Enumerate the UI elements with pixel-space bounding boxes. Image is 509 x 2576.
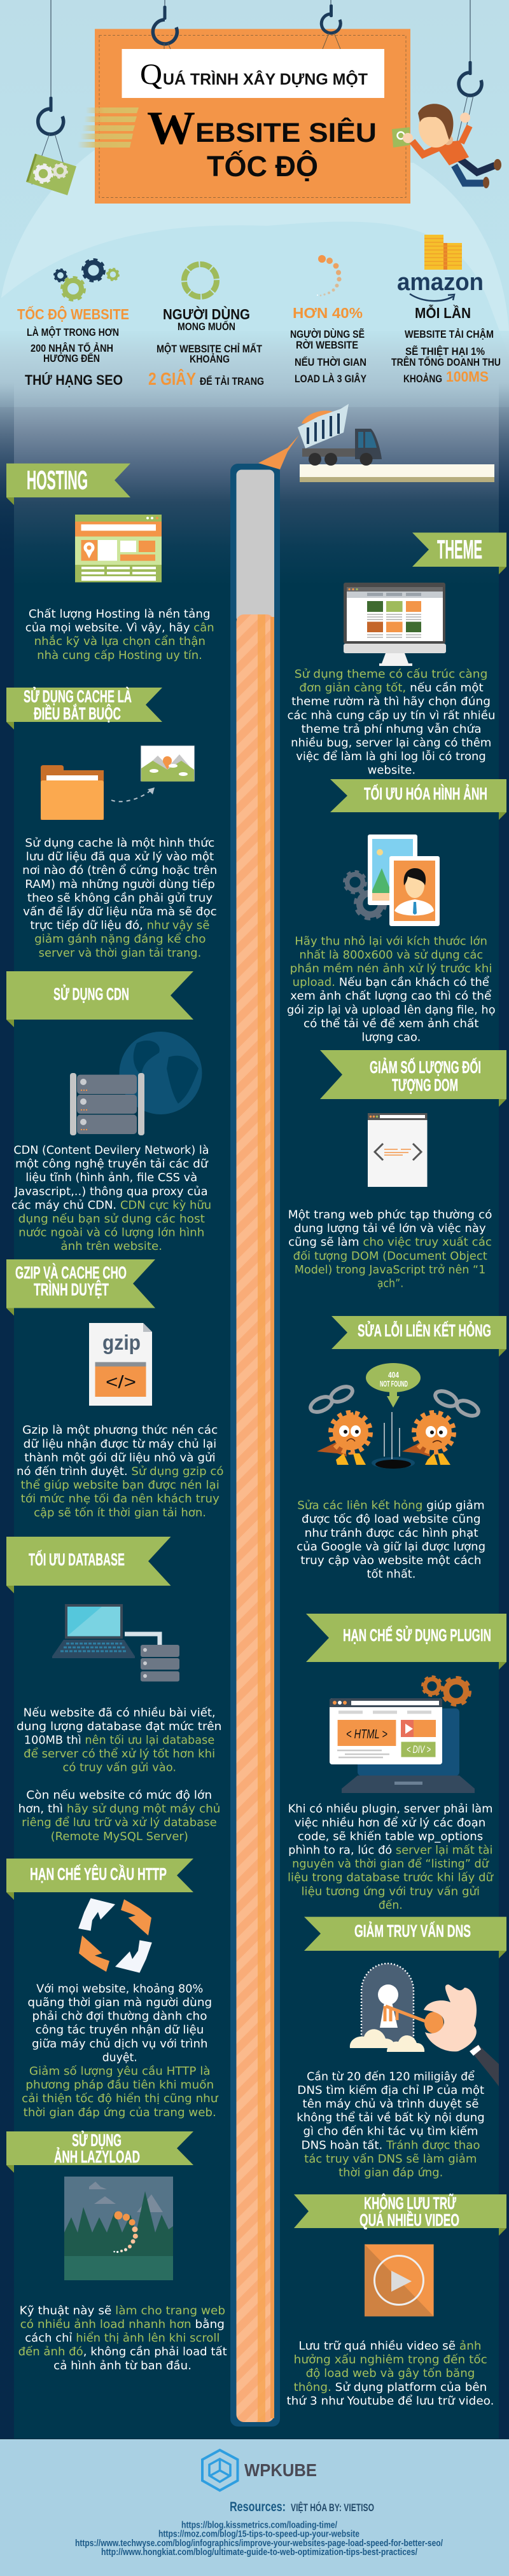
title main <box>147 102 377 183</box>
stat: users expect: KHOẢNG <box>190 353 230 365</box>
text block: gzip: dữ liệu nhận được từ máy chủ lại <box>24 1438 216 1451</box>
hook right with man <box>392 0 501 188</box>
icon: video play <box>365 2244 434 2316</box>
ribbon: cache: SỬ DỤNG CACHE LÀ <box>24 686 132 706</box>
ribbon: cache <box>6 686 162 730</box>
ribbon: http <box>6 1859 193 1900</box>
resource links: http://www.hongkiat.com/blog/ultimate-guide-to-web-optimization-tips-best-practices/ <box>101 2547 418 2558</box>
ribbon: broken links <box>331 1316 506 1357</box>
text block: dom: Một trang web phức tạp thường có <box>288 1208 492 1221</box>
text block: dom: đối tượng DOM (Document Object <box>293 1249 487 1263</box>
text block: theme: việc để làm là ghi log lỗi có trong <box>296 750 486 763</box>
text block: lazyload: đến ảnh đó, không cần phải load tất <box>18 2345 227 2358</box>
text block: cdn: CDN (Content Devilery Network) là <box>13 1144 209 1157</box>
text block: image optimisation: xem ảnh chất lượng cao thì có thể <box>290 990 492 1003</box>
text block: http: quãng thời gian mà người dùng <box>27 1997 212 2009</box>
text block: plugins: Khi có nhiều plugin, server phải làm <box>288 1803 492 1816</box>
ribbon: http: HẠN CHẾ YÊU CẦU HTTP <box>30 1864 167 1884</box>
panel: lazyload <box>6 2129 227 2372</box>
ribbon: hosting <box>6 464 130 505</box>
text block: cache: RAM) mà những người dùng tiếp <box>25 878 215 891</box>
title first line: Q <box>140 58 162 91</box>
text block: cdn: ảnh trên website. <box>60 1240 162 1253</box>
logo: wpkube: WPKUBE <box>244 2460 317 2480</box>
text block: gzip: thể giúp website bạn được nén lại <box>21 1479 220 1492</box>
text block: theme: theme rườm rà thì hãy chọn đúng <box>291 696 491 709</box>
icon: plugin browser on laptop: < HTML > <box>346 1728 387 1742</box>
icon: photo cards <box>345 834 440 926</box>
resources heading: VIỆT HÓA BY: VIETISO <box>291 2502 374 2514</box>
stat: amazon: 100MS <box>446 368 489 385</box>
text block: broken links: như tránh được các hình phạt <box>305 1527 478 1540</box>
resource links <box>75 2520 443 2558</box>
icon: code window <box>368 1113 428 1187</box>
stat: 40 percent: NGƯỜI DÙNG SẼ <box>290 328 365 340</box>
text block: http: cải thiện tốc độ hiển thị cũng như <box>22 2092 218 2105</box>
ribbon: gzip <box>6 1259 155 1315</box>
icon: gzip file <box>89 1323 152 1406</box>
text block: dns: Cần từ 20 đến 120 miligiây để <box>307 2070 475 2083</box>
text block: image optimisation: lượng cao. <box>361 1032 421 1044</box>
icon: website layout <box>75 515 162 583</box>
ribbon: video <box>294 2193 506 2236</box>
text block: broken links <box>296 1499 485 1581</box>
icon: 404 monsters: 404 <box>388 1370 400 1380</box>
amazon logo: amazon <box>397 269 484 296</box>
text block: cache: trực tiếp dữ liệu đó, như vậy sẽ <box>30 919 210 932</box>
text block: http: phương pháp đầu tiên khi muốn <box>25 2079 214 2092</box>
panel: broken links <box>296 1316 506 1581</box>
stat: amazon: SẼ THIỆT HẠI 1% <box>405 345 485 357</box>
poured material <box>258 435 299 469</box>
panel: plugins <box>288 1614 506 1912</box>
hook top 1 <box>153 0 177 49</box>
text block: dns <box>296 2070 485 2179</box>
icon: 404 monsters <box>308 1363 481 1469</box>
text block: video: thứ 3 như Youtube để lưu trữ video. <box>286 2394 494 2407</box>
text block: http: duyệt. <box>102 2051 137 2064</box>
text block: http: giữa máy chủ dịch vụ với trình <box>32 2038 208 2051</box>
text block: image optimisation <box>287 935 496 1044</box>
ribbon: gzip: TRÌNH DUYỆT <box>34 1280 109 1299</box>
ribbon: plugins <box>306 1614 506 1670</box>
panel: http requests <box>6 1859 218 2119</box>
panel: hosting <box>6 464 214 662</box>
ribbon: dom: TƯỢNG DOM <box>392 1076 458 1095</box>
text block: dns: thời gian đáp ứng. <box>338 2166 443 2179</box>
text block: video: hưởng xấu nghiêm trọng đến tốc <box>294 2353 487 2367</box>
stat: website speed: 200 NHÂN TỐ ẢNH <box>31 342 113 354</box>
ribbon: lazyload: SỬ DỤNG <box>72 2129 122 2150</box>
text block: cache: theo sẽ không cần phải gửi truy <box>27 891 213 904</box>
panel: database <box>6 1537 221 1843</box>
title main: TỐC ĐỘ <box>207 150 318 183</box>
icon: folder to image <box>41 745 195 820</box>
text block: http: thời gian đáp ứng của trang web. <box>24 2107 216 2119</box>
text block: http: công tác truyền nhận dữ liệu <box>36 2023 204 2037</box>
text block: video <box>286 2339 494 2407</box>
icon: forest with spinner <box>64 2177 173 2280</box>
stat: users expect: MỘT WEBSITE CHỈ MẤT <box>157 343 263 355</box>
text block: http <box>22 1983 218 2119</box>
stat: users expect: 2 GIÂY <box>148 369 196 389</box>
icon: monitor <box>344 583 446 666</box>
icon: refresh arrows <box>78 1898 152 1973</box>
text block: plugins <box>288 1803 494 1912</box>
stat: users expect: ĐỂ TẢI TRANG <box>200 375 264 387</box>
text block: hosting <box>25 607 214 662</box>
icon: loading ring <box>185 265 216 296</box>
title main: W <box>147 102 195 155</box>
icon: gzip file: gzip <box>102 1331 141 1354</box>
text block: cdn: một công nghệ truyền tải các dữ <box>15 1158 209 1171</box>
panel: video <box>286 2193 506 2407</box>
title first line <box>140 58 368 91</box>
title first line: UÁ TRÌNH XÂY DỰNG MỘT <box>163 69 368 88</box>
text block: hosting: nhà cung cấp Hosting uy tín. <box>37 649 202 662</box>
text block: cache <box>22 837 217 960</box>
title main: EBSITE SIÊU <box>195 117 377 148</box>
text block: database: riêng để lưu trữ và xử lý database <box>22 1816 217 1829</box>
text block: theme: đơn giản càng tốt, nếu cần một <box>299 681 484 695</box>
ribbon: dom <box>320 1050 506 1107</box>
text block: dns: tác truy vấn DNS sẽ làm giảm <box>304 2152 477 2166</box>
truck pouring into tube <box>258 404 494 482</box>
stat: users expect <box>148 265 264 389</box>
ribbon: lazyload: ẢNH LAZYLOAD <box>54 2146 140 2166</box>
text block: hosting: nhắc kỹ và lựa chọn cẩn thận <box>34 635 206 648</box>
text block: cdn: liệu tĩnh (hình ảnh, file CSS và <box>25 1172 197 1184</box>
text block: dom: ạch”. <box>377 1277 403 1290</box>
panel: cdn <box>6 971 211 1253</box>
text block: database: để server có thể xử lý tốt hơn khi <box>24 1747 215 1761</box>
stat: amazon <box>391 235 501 385</box>
stat: users expect: NGƯỜI DÙNG <box>163 305 250 322</box>
icon: laptop and database <box>52 1604 179 1682</box>
stat: website speed <box>17 260 129 388</box>
text block: video: thông. Sử dụng platform của bên <box>294 2381 487 2394</box>
text block: dns: không thể tải về bất kỳ nội dung <box>296 2111 485 2124</box>
platform <box>300 464 494 482</box>
text block: lazyload: Kỹ thuật này sẽ làm cho trang web <box>20 2304 225 2317</box>
text block: database: dung lượng database đạt mức trên <box>17 1721 221 1733</box>
text block: dom <box>288 1208 492 1290</box>
footer <box>0 2439 509 2576</box>
ribbon: database <box>6 1537 171 1593</box>
resource links: https://moz.com/blog/15-tips-to-speed-up-your-website <box>158 2529 359 2540</box>
text block: lazyload: cả hình ảnh từ ban đầu. <box>53 2359 192 2372</box>
text block: cache: lưu dữ liệu đã qua xử lý vào một <box>26 851 214 864</box>
icon: gzip file: </> <box>106 1372 136 1392</box>
panel: image optimisation <box>287 779 506 1044</box>
ribbon: gzip: GZIP VÀ CACHE CHO <box>15 1263 127 1282</box>
text block: dns: tên máy chủ và trình duyệt sẽ <box>303 2098 478 2110</box>
ribbon: cdn: SỬ DỤNG CDN <box>53 983 129 1004</box>
text block: plugins: việc nhiều hơn để xử lý các đoạn <box>295 1816 485 1829</box>
text block: image optimisation: có thể tải về để xem ảnh chất <box>303 1017 479 1030</box>
stat: website speed: LÀ MỘT TRONG HƠN <box>27 326 119 338</box>
resources heading: Resources: <box>230 2500 286 2514</box>
text block: plugins: liệu trong database trước khi lấy dữ <box>288 1871 494 1885</box>
text block: gzip: cập sẽ tốn ít thời gian tải hơn. <box>34 1506 206 1520</box>
text block: theme: website. <box>368 765 415 777</box>
text block: dns: DNS tìm kiếm địa chỉ IP của một <box>297 2084 484 2097</box>
stat: 40 percent: RỜI WEBSITE <box>296 339 358 351</box>
icon: loading dots <box>317 255 342 296</box>
ribbon: cache: ĐIỀU BẮT BUỘC <box>34 703 121 723</box>
icon: 404 monsters: NOT FOUND <box>380 1379 408 1388</box>
stat: website speed: THỨ HẠNG SEO <box>25 372 123 388</box>
ribbon: theme <box>412 532 506 574</box>
text block: cdn <box>11 1144 211 1253</box>
text block: theme <box>288 668 495 777</box>
truck <box>298 404 382 466</box>
text block: broken links: tốt nhất. <box>366 1568 416 1581</box>
ribbon: hosting: HOSTING <box>27 465 88 495</box>
ribbon: video: KHÔNG LƯU TRỮ <box>364 2193 456 2213</box>
panel: theme <box>288 532 506 777</box>
panel: cache <box>6 686 217 960</box>
text block: lazyload: cách chỉ hiển thị ảnh lên khi scroll <box>25 2332 220 2345</box>
sign board <box>95 29 410 204</box>
text block: cache: Sử dụng cache là một hình thức <box>25 837 214 850</box>
text block: image optimisation: upload. Nếu bạn cần khách có thể <box>293 976 489 989</box>
text block: gzip: nó đến trình duyệt. Sử dụng gzip có <box>17 1465 224 1478</box>
text block: http: Giảm số lượng yêu cầu HTTP là <box>29 2065 211 2078</box>
text block: http: phải chờ đợi thường dành cho <box>32 2011 207 2023</box>
resources heading <box>230 2500 374 2514</box>
text block: database: (Remote MySQL Server) <box>51 1831 188 1843</box>
text block: hosting: của mọi website. Vì vậy, hãy cân <box>25 622 214 635</box>
stat: users expect: MONG MUỐN <box>178 320 235 333</box>
text block: broken links: được tốc độ load website cũng <box>302 1513 481 1526</box>
text block: dom: dung lượng tải về lớn và việc này <box>294 1222 486 1235</box>
panel: dns <box>296 1917 506 2179</box>
text block: theme: theme trả phí nhưng vẫn chứa <box>302 723 482 736</box>
logo: wpkube <box>202 2450 317 2491</box>
icon: server and globe <box>70 1032 202 1135</box>
text block: cdn: dụng nếu bạn sử dụng các host <box>18 1212 205 1226</box>
text block: cdn: nước ngoài và có lượng lớn hình <box>18 1227 204 1240</box>
text block: image optimisation: phần mềm nén ảnh xử lý trước khi <box>290 962 492 976</box>
text block: cdn: Javascript,..) thông qua proxy của <box>14 1186 208 1198</box>
text block: hosting: Chất lượng Hosting là nền tảng <box>29 607 211 621</box>
icon: coin stacks <box>424 235 462 270</box>
resource links: https://blog.kissmetrics.com/loading-time/ <box>181 2520 338 2531</box>
text block: plugins: liệu tương ứng với truy vấn gửi <box>302 1885 480 1898</box>
text block: cdn: các máy chủ CDN. CDN cực kỳ hữu <box>11 1199 211 1212</box>
panel: gzip <box>6 1259 224 1520</box>
stats row <box>17 235 501 389</box>
hook left with gear card <box>26 0 76 195</box>
text block: lazyload: có nhiều ảnh load nhanh hơn bằng <box>20 2318 225 2331</box>
text block: gzip: thành một gói dữ liệu nhỏ và gửi <box>24 1451 216 1464</box>
text block: gzip <box>17 1424 224 1520</box>
text block: dns: gì cho đến khi tác vụ tìm kiếm <box>303 2125 478 2138</box>
text block: gzip: tới mức nhẹ tối đa nên khách truy <box>21 1492 220 1506</box>
text block: dom: cũng sẽ làm cho việc truy xuất các <box>288 1236 492 1249</box>
text block: database: Nếu website đã có nhiều bài viết, <box>24 1706 216 1719</box>
ribbon: image optimisation <box>330 779 506 820</box>
text block: plugins: phình to ra, lúc đó server lại mất tài <box>288 1843 492 1857</box>
stat: website speed: HƯỞNG ĐẾN <box>43 352 100 364</box>
stat: 40 percent: LOAD LÀ 3 GIÂY <box>295 373 367 385</box>
text block: theme: Sử dụng theme có cấu trúc càng <box>295 668 487 681</box>
speed stripes <box>78 107 139 148</box>
text block: image optimisation: gói zip lại và upload lên dạng file, họ <box>287 1004 496 1016</box>
text block: video: độ load web và gây tốn băng <box>306 2367 475 2380</box>
text block: database: hơn, thì hãy sử dụng một máy chủ <box>18 1803 220 1816</box>
text block: broken links: truy cập vào website một cách <box>300 1555 482 1567</box>
stat: 40 percent: HƠN 40% <box>293 305 363 321</box>
text block: gzip: Gzip là một phương thức nén các <box>22 1424 218 1437</box>
text block: broken links: Sửa các liên kết hỏng giúp giảm <box>297 1499 485 1513</box>
stat: 40 percent: NẾU THỜI GIAN <box>295 356 366 368</box>
text block: theme: nhiều bug, server lại càng có thêm <box>291 737 491 749</box>
text block: cache: nơi nào đó (trên ổ cứng hoặc trên <box>22 864 217 877</box>
stat: amazon: WEBSITE TẢI CHẬM <box>405 328 494 340</box>
text block: video: Lưu trữ quá nhiều video sẽ ảnh <box>298 2339 482 2353</box>
stat: website speed: TỐC ĐỘ WEBSITE <box>17 305 129 322</box>
icon: plugin browser on laptop <box>330 1677 475 1793</box>
text block: broken links: của Google và giữ lại được lượng <box>296 1541 485 1553</box>
text block: database <box>17 1706 221 1843</box>
icon: keyhole and hand <box>350 1963 499 2086</box>
text block: dns: DNS hoàn tất. Tránh được thao <box>302 2138 480 2152</box>
ribbon: cdn <box>6 971 193 1027</box>
text block: theme: các nhà cung cấp uy tín vì rất nhiều <box>288 709 495 722</box>
text block: cache: vấn để lấy dữ liệu nữa mà sẽ đọc <box>23 905 217 918</box>
icon: plugin browser on laptop: < DIV > <box>407 1743 431 1755</box>
text block: lazyload <box>18 2304 227 2372</box>
text block: database: 100MB thì nên tối ưu lại database <box>24 1734 214 1747</box>
panel: dom <box>288 1050 506 1290</box>
text block: cache: giảm gánh nặng đáng kể cho <box>34 932 206 946</box>
stat: amazon: MỖI LẦN <box>415 303 471 321</box>
header: title sign with hooks <box>26 0 501 204</box>
text block: image optimisation: Hãy thu nhỏ lại với kích thước lớn <box>295 935 487 948</box>
text block: dom: Model) trong JavaScript trở nên “1 <box>295 1264 485 1277</box>
ribbon: lazyload <box>6 2129 193 2173</box>
ribbon: database: TỐI ƯU DATABASE <box>29 1549 125 1569</box>
text block: image optimisation: nhất là 800x600 và sử dụng các <box>299 948 483 962</box>
icon: gears <box>55 260 118 300</box>
text block: cache: server và thời gian tải trang. <box>39 947 201 960</box>
hook top 2 <box>321 0 340 49</box>
text block: database: Còn nếu website có mức độ lớn <box>26 1789 212 1802</box>
progress tube <box>230 464 280 2427</box>
text block: plugins: đến. <box>379 1899 403 1912</box>
text block: database: có truy vấn gửi vào. <box>62 1761 176 1775</box>
stat: 40 percent <box>290 255 367 385</box>
stat: amazon: KHOẢNG <box>403 373 442 385</box>
text block: plugins: nguyên và thời gian để “listing” dữ <box>292 1857 489 1871</box>
ribbon: dns <box>304 1917 506 1958</box>
text block: plugins: code, sẽ khiến table wp_options <box>298 1830 483 1843</box>
text block: http: Với mọi website, khoảng 80% <box>36 1983 203 1995</box>
